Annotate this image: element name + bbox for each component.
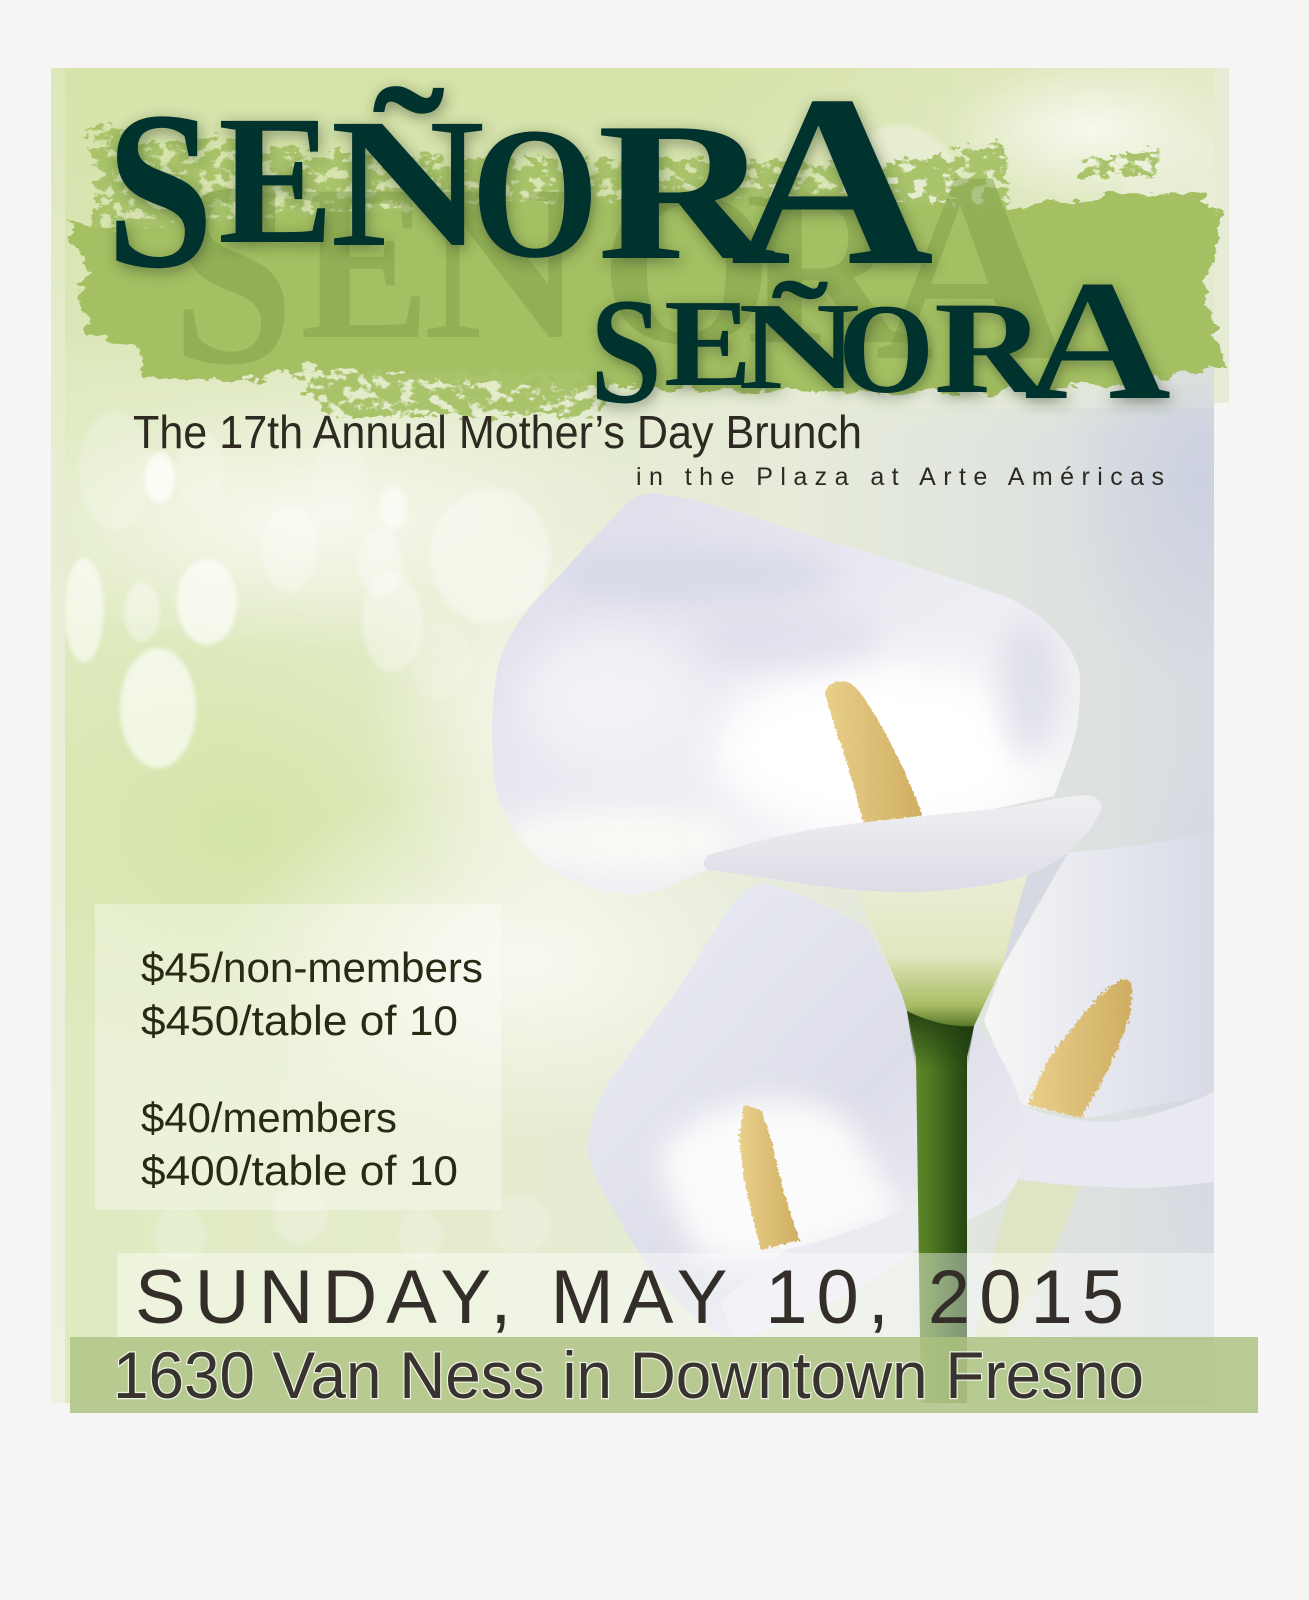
flower: lower left calla: [587, 883, 1025, 1340]
right flower calyx: [975, 1180, 1080, 1340]
ghosted title behind band: N: [423, 140, 583, 386]
second title: R: [934, 274, 1048, 421]
main title: R: [597, 82, 774, 301]
subtitle: The 17th Annual Mother’s Day Brunch: [133, 406, 862, 458]
price: table members: $400/table of 10: [141, 1147, 458, 1194]
top flower shading: [500, 547, 1060, 875]
flowers: [492, 493, 1214, 1410]
lower flower petal: [587, 883, 1025, 1340]
ghosted title behind band: O: [600, 145, 773, 391]
address: 1630 Van Ness in Downtown Fresno: [113, 1338, 1144, 1412]
main title: Ñ: [330, 81, 485, 286]
flower: stem: [907, 1011, 974, 1410]
brush stroke band: [68, 126, 1226, 416]
photo background with soft bokeh: [65, 68, 1214, 1403]
second title: A: [1024, 246, 1171, 436]
price: members: $40/members: [141, 1094, 397, 1141]
stem shaft: [907, 1011, 974, 1410]
ghosted title behind band: A: [875, 116, 1071, 417]
right flower petal: [984, 832, 1214, 1118]
stem dark collar: [907, 1011, 974, 1070]
outer green panel: [51, 68, 1229, 403]
funnel right sheen: [1003, 850, 1069, 965]
lower flower white throat: [660, 1099, 905, 1262]
main title: E: [218, 78, 334, 283]
brush: grainy upper stroke: [85, 126, 1012, 240]
ghosted title behind band: R: [745, 145, 908, 391]
second title: Ñ: [738, 278, 860, 416]
date: SUNDAY, MAY 10, 2015: [135, 1255, 1124, 1340]
venue line: in the Plaza at Arte Américas: [636, 463, 1164, 491]
lower flower spadix: [739, 1105, 800, 1250]
right flower lip: [1020, 1092, 1214, 1188]
lower flower lip: [782, 1224, 872, 1317]
ghosted title behind band: E: [300, 140, 430, 386]
date band: [117, 1253, 1214, 1337]
top flower spadix: [825, 681, 922, 823]
second title: O: [838, 278, 934, 420]
second title: S: [590, 267, 662, 435]
price: table non-members: $450/table of 10: [141, 997, 458, 1044]
address band: [70, 1337, 1258, 1413]
price: non-members: $45/non-members: [141, 944, 483, 991]
top flower petal: [492, 493, 1080, 894]
main title: A: [730, 45, 934, 316]
main title: O: [471, 88, 599, 297]
flower: top calla: [492, 493, 1102, 894]
price box background: [95, 904, 501, 1210]
brush: flecks and lower fringe: [290, 150, 1160, 416]
panel: ticket prices: [95, 904, 501, 1210]
flower: right rear calla: [975, 832, 1214, 1340]
ghosted title behind band: S: [172, 129, 294, 419]
main title: S: [106, 65, 214, 315]
flower: funnel: [858, 875, 1028, 1026]
left pale strip: [51, 68, 65, 1403]
brush: main stroke: [68, 190, 1226, 392]
second title: E: [664, 275, 752, 413]
right flower spadix: [1028, 979, 1132, 1118]
top flower lip: [704, 795, 1102, 892]
